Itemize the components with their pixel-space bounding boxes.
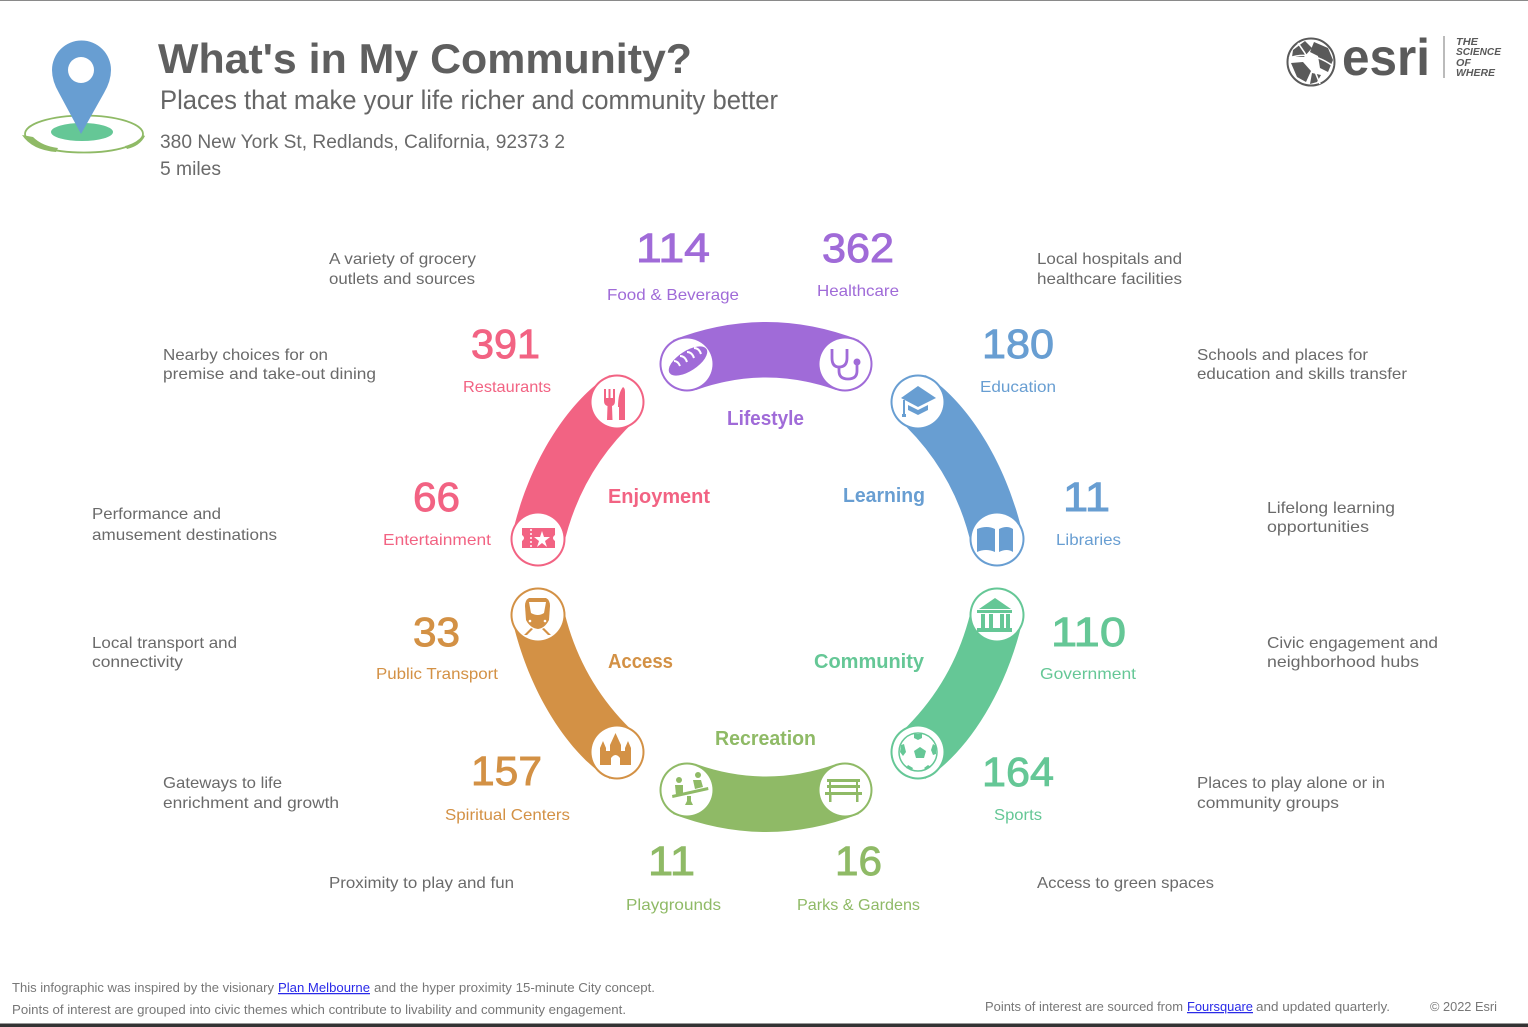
description: Healthcare: healthcare facilities bbox=[1037, 271, 1182, 288]
stat: Playgrounds: 11 bbox=[648, 838, 695, 884]
description: Entertainment bbox=[92, 506, 277, 544]
heading: Recreation: Recreation bbox=[715, 728, 816, 750]
stat: Government: 110 bbox=[1051, 609, 1126, 655]
stat: Food & Beverage bbox=[607, 225, 739, 304]
icon: location pin bbox=[22, 41, 145, 152]
description: Public Transport: connectivity bbox=[92, 654, 183, 671]
description: Restaurants: Nearby choices for on bbox=[163, 347, 328, 364]
stat: Government: Government bbox=[1040, 666, 1137, 683]
footer note: left bbox=[12, 981, 655, 1017]
stat: Playgrounds bbox=[626, 838, 721, 914]
footer note: right: Points of interest are sourced from bbox=[985, 1000, 1183, 1014]
icon: train bbox=[524, 598, 551, 635]
stat: Education: Education bbox=[980, 379, 1056, 396]
stat: Libraries bbox=[1056, 474, 1121, 549]
panel: Learning bbox=[843, 374, 1024, 566]
stat: Spiritual Centers: Spiritual Centers bbox=[445, 807, 570, 824]
learning band bbox=[890, 374, 1024, 566]
footer note: right: and updated quarterly. bbox=[1256, 1000, 1390, 1014]
stat: Parks & Gardens: 16 bbox=[835, 838, 882, 884]
stat: Sports bbox=[982, 749, 1054, 824]
stat: Parks & Gardens bbox=[797, 838, 920, 914]
icon: soccer ball bbox=[899, 733, 937, 771]
description: Food & Beverage: A variety of grocery bbox=[329, 251, 476, 268]
description: Government: neighborhood hubs bbox=[1267, 654, 1419, 671]
icon: stethoscope bbox=[832, 349, 860, 379]
description: Food & Beverage: outlets and sources bbox=[329, 271, 475, 288]
description: Libraries: opportunities bbox=[1267, 519, 1369, 536]
description: Parks & Gardens: Access to green spaces bbox=[1037, 875, 1214, 892]
stat: Food & Beverage: Food & Beverage bbox=[607, 287, 739, 304]
stat: Healthcare: 362 bbox=[822, 225, 894, 271]
icon: fork and knife bbox=[604, 387, 625, 420]
stat: Parks & Gardens: Parks & Gardens bbox=[797, 897, 920, 914]
stat: Restaurants: Restaurants bbox=[463, 379, 551, 396]
heading: Lifestyle: Lifestyle bbox=[727, 408, 804, 430]
panel: Access bbox=[510, 588, 673, 780]
icon: government building bbox=[977, 598, 1012, 632]
heading: Community: Community bbox=[814, 651, 925, 673]
address: 380 New York St, Redlands, California, 92373 2 bbox=[160, 132, 565, 153]
icon: bench bbox=[825, 779, 862, 802]
description: Spiritual Centers: enrichment and growth bbox=[163, 795, 339, 812]
stat: Sports: Sports bbox=[994, 807, 1042, 824]
description: Entertainment: amusement destinations bbox=[92, 527, 277, 544]
stat: Public Transport: 33 bbox=[413, 609, 460, 655]
subtitle: Places that make your life richer and community better bbox=[160, 85, 778, 115]
tagline: OF bbox=[1456, 57, 1472, 69]
tagline: THE bbox=[1456, 36, 1479, 48]
stat: Public Transport: Public Transport bbox=[376, 666, 499, 683]
description: Education bbox=[1197, 347, 1408, 383]
description: Libraries: Lifelong learning bbox=[1267, 500, 1395, 517]
tagline: WHERE bbox=[1456, 67, 1496, 79]
access band bbox=[510, 588, 644, 780]
copyright: © 2022 Esri bbox=[1430, 1000, 1497, 1014]
icon: graduation cap bbox=[901, 386, 936, 417]
description: Sports: Places to play alone or in bbox=[1197, 775, 1385, 792]
stat: Playgrounds: Playgrounds bbox=[626, 897, 721, 914]
panel: Recreation bbox=[660, 728, 872, 832]
icon: ticket bbox=[522, 528, 555, 548]
icon: bread bbox=[664, 341, 712, 381]
recreation band bbox=[660, 762, 872, 832]
description: Food & Beverage bbox=[329, 251, 476, 288]
description: Healthcare bbox=[1037, 251, 1182, 288]
stat: Entertainment: 66 bbox=[413, 474, 460, 520]
lifestyle band bbox=[660, 322, 872, 392]
stat: Government bbox=[1040, 609, 1137, 683]
description: Government bbox=[1267, 635, 1438, 671]
stat: Food & Beverage: 114 bbox=[636, 225, 710, 271]
icon: seesaw bbox=[672, 772, 708, 805]
description: Entertainment: Performance and bbox=[92, 506, 221, 523]
description: Spiritual Centers bbox=[163, 775, 339, 812]
footer note: right bbox=[985, 1000, 1390, 1014]
stat: Entertainment bbox=[383, 474, 492, 549]
stat: Spiritual Centers bbox=[445, 748, 570, 824]
panel: Enjoyment bbox=[510, 374, 710, 566]
footer note: left: This infographic was inspired by the visionary bbox=[12, 981, 275, 995]
footer note: right: Foursquare bbox=[1187, 1000, 1253, 1014]
description: Government: Civic engagement and bbox=[1267, 635, 1438, 652]
description: Sports bbox=[1197, 775, 1385, 812]
description: Public Transport: Local transport and bbox=[92, 635, 237, 652]
tagline: SCIENCE bbox=[1456, 46, 1502, 58]
description: Restaurants bbox=[163, 347, 376, 383]
heading: Access: Access bbox=[608, 651, 673, 673]
title: What's in My Community? bbox=[158, 35, 692, 82]
search radius: 5 miles bbox=[160, 159, 221, 180]
esri logo bbox=[1288, 29, 1502, 87]
panel: Lifestyle bbox=[660, 322, 872, 430]
stat: Education: 180 bbox=[982, 321, 1054, 367]
stat: Healthcare bbox=[817, 225, 899, 300]
description: Education: education and skills transfer bbox=[1197, 366, 1408, 383]
stat: Restaurants bbox=[463, 321, 551, 396]
stat: Spiritual Centers: 157 bbox=[471, 748, 542, 794]
heading: Learning: Learning bbox=[843, 485, 925, 507]
description: Healthcare: Local hospitals and bbox=[1037, 251, 1182, 268]
stat: Libraries: Libraries bbox=[1056, 532, 1121, 549]
heading: Enjoyment: Enjoyment bbox=[608, 486, 710, 508]
panel: Community bbox=[814, 588, 1024, 780]
footer note: left: and the hyper proximity 15-minute City concept. bbox=[374, 981, 655, 995]
icon: open book bbox=[977, 527, 1013, 552]
footer note: left: Points of interest are grouped into civic themes which contribute to livability and community engagement. bbox=[12, 1003, 626, 1017]
stat: Healthcare: Healthcare bbox=[817, 283, 899, 300]
description: Restaurants: premise and take-out dining bbox=[163, 366, 376, 383]
stat: Restaurants: 391 bbox=[471, 321, 540, 367]
description: Spiritual Centers: Gateways to life bbox=[163, 775, 282, 792]
description: Playgrounds: Proximity to play and fun bbox=[329, 875, 514, 892]
tagline bbox=[1456, 36, 1502, 79]
description: Public Transport bbox=[92, 635, 237, 671]
description: Education: Schools and places for bbox=[1197, 347, 1369, 364]
stat: Education bbox=[980, 321, 1056, 396]
icon: cathedral bbox=[600, 733, 631, 765]
description: Sports: community groups bbox=[1197, 795, 1339, 812]
enjoyment band bbox=[510, 374, 644, 566]
stat: Sports: 164 bbox=[982, 749, 1054, 795]
footer note: left: Plan Melbourne bbox=[278, 981, 370, 995]
icon: esri globe bbox=[1288, 38, 1334, 86]
stat: Entertainment: Entertainment bbox=[383, 532, 492, 549]
esri wordmark: esri bbox=[1342, 29, 1430, 87]
community band bbox=[890, 588, 1024, 780]
description: Libraries bbox=[1267, 500, 1395, 536]
stat: Public Transport bbox=[376, 609, 499, 683]
stat: Libraries: 11 bbox=[1063, 474, 1110, 520]
